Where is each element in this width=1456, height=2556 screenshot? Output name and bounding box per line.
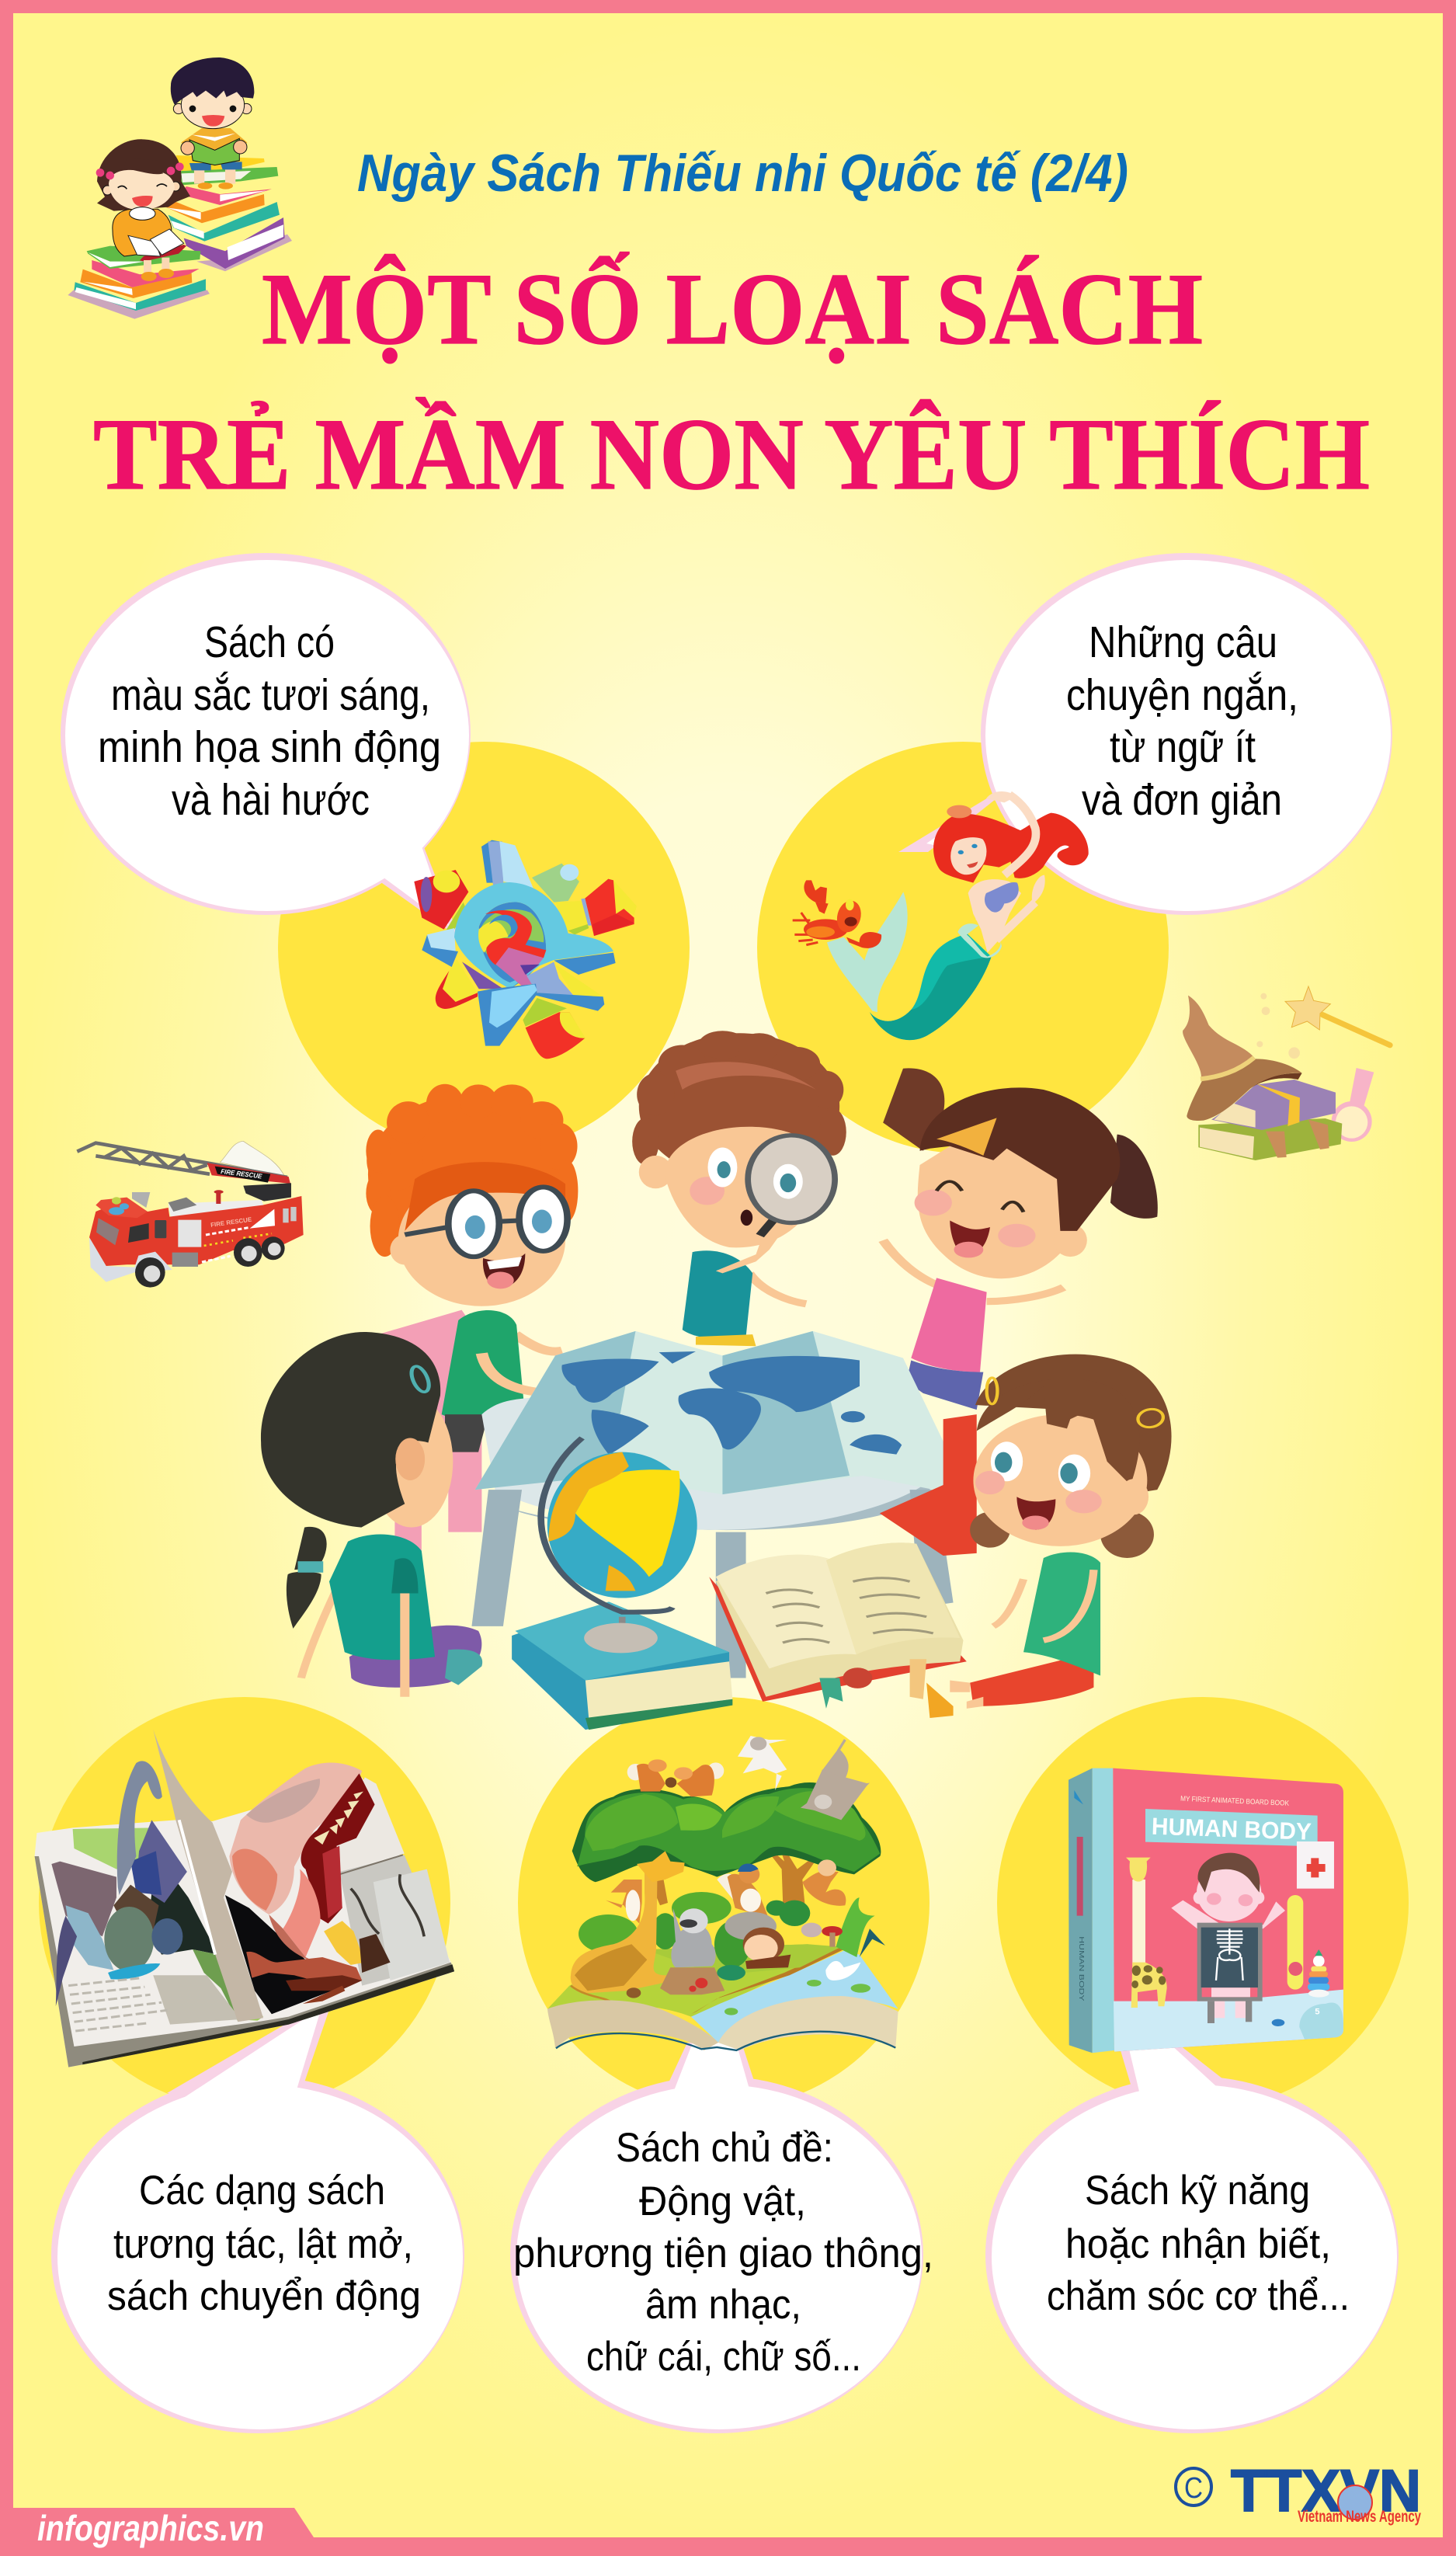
text: skills books bubble: Sách kỹ năng [1085,2168,1310,2213]
speech bubble: bottom right [985,2043,1399,2433]
world map [475,1331,970,1497]
child: girl with black hair [261,1332,482,1697]
icon: jungle pop-up book [547,1736,898,2050]
text: themed books bubble: phương tiện giao thông, [513,2231,933,2276]
speech bubble: bottom left [51,1996,464,2433]
icon: Human Body board book: HUMAN BODY [1078,1936,1085,2002]
text: bright colours bubble: màu sắc tươi sáng, [111,670,430,720]
text: short stories bubble: và đơn giản [1082,775,1282,825]
icon: Human Body board book [1069,1768,1343,2053]
text: themed books bubble: Sách chủ đề: [616,2125,833,2171]
icon: colourful toy [414,840,637,1059]
heading: title: TRẺ MẦM NON YÊU THÍCH [93,397,1370,511]
text: short stories bubble: chuyện ngắn, [1066,670,1298,720]
child: red-haired boy with glasses [366,1084,578,1452]
text: short stories bubble: từ ngữ ít [1110,722,1256,772]
icon: mermaid and crab [793,791,1089,1040]
icon: wizard hat, books, flask and wand [1183,986,1390,1160]
icon: children reading on book stacks [68,57,292,319]
logo: TTXVN: C [1184,2472,1203,2505]
icon: pop-up dinosaur book [35,1730,454,2067]
text: themed books bubble: âm nhạc, [645,2282,801,2328]
icon: fire truck: FIRE RESCUE [210,1216,252,1229]
icon: Human Body board book: HUMAN BODY [1151,1814,1312,1845]
red box [880,1414,977,1556]
text: bright colours bubble [98,617,441,825]
heading: title: MỘT SỐ LOẠI SÁCH [262,252,1203,366]
child: girl with yellow hair clips [910,1355,1172,1718]
text: bright colours bubble: và hài hước [172,775,370,825]
open book [709,1542,967,1709]
icon: Human Body board book: MY FIRST ANIMATED BOARD BOOK [1180,1795,1290,1807]
text: skills books bubble: hoặc nhận biết, [1065,2221,1331,2267]
text: themed books bubble: chữ cái, chữ số... [586,2334,861,2380]
text: interactive books bubble [107,2168,421,2319]
text: themed books bubble [513,2125,933,2380]
yellow circles [39,742,1409,2109]
text: bright colours bubble: minh họa sinh động [98,722,441,772]
text: skills books bubble: chăm sóc cơ thể... [1047,2273,1350,2319]
text: skills books bubble [1047,2168,1350,2319]
table [471,1396,954,1678]
icon: Human Body board book: 5 [1315,2007,1320,2016]
globe on book [512,1438,732,1730]
footer: website tab: infographics.vn [37,2508,264,2548]
icon: fire truck: FIRE RESCUE [221,1167,262,1180]
chair [378,1310,481,1551]
text: bright colours bubble: Sách có [204,617,335,667]
text: interactive books bubble: tương tác, lật mở, [113,2221,413,2267]
heading: subtitle: Ngày Sách Thiếu nhi Quốc tế (2/4) [357,144,1128,203]
child: boy with magnifying glass [632,1031,846,1346]
speech bubble: top right [898,553,1392,915]
heading: title [93,252,1370,511]
speech bubble: top left [61,553,471,938]
icon: fire truck [77,1141,304,1288]
child: girl with pigtails [883,1068,1158,1410]
logo: TTXVN: TTXVN [1231,2458,1421,2524]
text: interactive books bubble: Các dạng sách [139,2168,385,2213]
text: short stories bubble: Những câu [1089,617,1277,667]
speech bubble: bottom middle [510,2043,923,2433]
text: interactive books bubble: sách chuyển động [107,2273,421,2319]
text: themed books bubble: Động vật, [639,2179,806,2224]
text: short stories bubble [1066,617,1298,825]
main illustration: children around a map [261,1031,1172,1730]
